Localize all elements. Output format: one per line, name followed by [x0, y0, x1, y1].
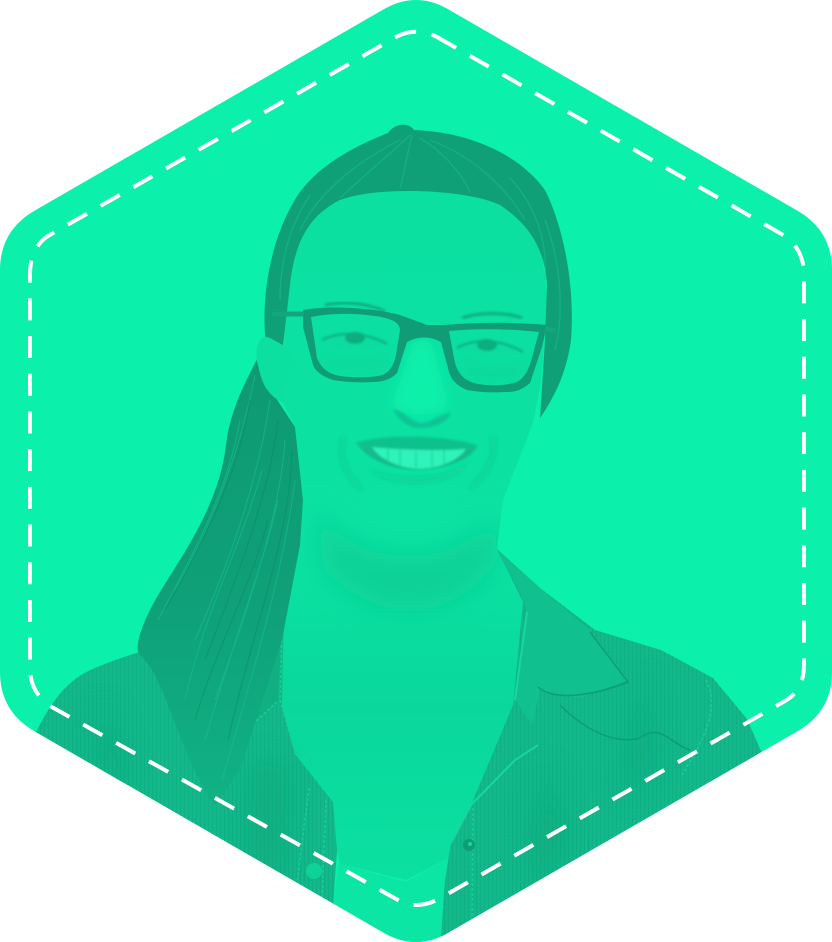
- smile lines: [342, 436, 493, 490]
- shirt folds: [249, 741, 646, 869]
- photo of smiling woman: [36, 125, 765, 942]
- mouth: [355, 437, 479, 483]
- lower lip: [380, 460, 464, 483]
- right collar: [497, 549, 628, 725]
- glasses: [272, 308, 556, 392]
- hair: [264, 125, 572, 418]
- shirt left: [36, 633, 337, 904]
- left shirt button: [306, 863, 322, 879]
- lens shading: [320, 350, 530, 382]
- ponytail: [138, 350, 303, 805]
- undershirt: [333, 859, 448, 942]
- neck and face skin: [282, 190, 548, 880]
- left collar: [258, 653, 279, 718]
- nose: [392, 340, 451, 428]
- teeth: [372, 447, 466, 469]
- right shirt button: [463, 839, 475, 851]
- ear: [256, 336, 284, 403]
- chin and neck shadow: [318, 529, 497, 606]
- eyebrows: [325, 303, 522, 318]
- right eye: [457, 339, 523, 353]
- left eye: [322, 332, 387, 348]
- shirt right: [440, 549, 765, 942]
